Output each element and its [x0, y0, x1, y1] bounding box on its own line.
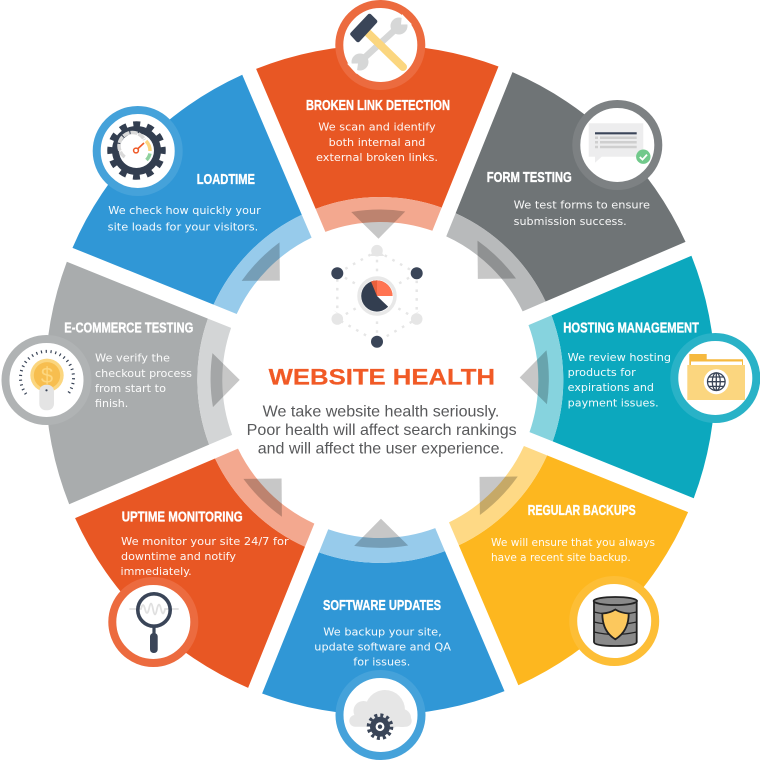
description	[120, 535, 289, 578]
icon: cloud with gear	[340, 674, 422, 756]
dashed hexagon	[337, 251, 417, 342]
description: We verify the	[95, 352, 170, 365]
dark nodes	[331, 267, 423, 348]
description: submission success.	[514, 215, 627, 228]
light nodes	[332, 245, 423, 325]
icon: form with check	[576, 104, 658, 186]
center text block: Poor health will affect search rankings	[247, 422, 517, 439]
heading: UPTIME MONITORING	[122, 509, 243, 526]
wedge	[414, 56, 701, 342]
description: We review hosting	[568, 351, 671, 364]
description: finish.	[95, 397, 128, 410]
description	[316, 121, 438, 164]
description: downtime and notify	[121, 550, 236, 563]
description	[568, 351, 671, 410]
description: both internal and	[329, 136, 425, 149]
description: We check how quickly your	[108, 204, 261, 217]
description: products for	[568, 366, 636, 379]
ring band	[207, 442, 321, 555]
panel: hosting management	[519, 256, 756, 500]
pointer triangle	[354, 518, 408, 548]
ring band	[316, 196, 442, 232]
center text block: We take website health seriously.	[263, 404, 499, 421]
icon: dollar coin and mouse: $	[41, 363, 53, 388]
description	[108, 204, 261, 233]
pointer triangle	[519, 350, 549, 404]
heading: E-COMMERCE TESTING	[64, 320, 193, 337]
description	[491, 536, 655, 564]
description: We scan and identify	[318, 121, 436, 134]
icon: hammer and wrench	[339, 4, 421, 86]
heading: REGULAR BACKUPS	[528, 502, 636, 519]
description: expirations and	[568, 381, 654, 394]
description: We test forms to ensure	[514, 199, 650, 212]
ring band	[197, 318, 232, 445]
center text block	[247, 404, 517, 457]
icon: dollar coin and mouse	[6, 339, 88, 421]
ring band	[528, 315, 564, 442]
ring band	[319, 528, 445, 564]
heading: BROKEN LINK DETECTION	[306, 97, 450, 114]
panel: software updates	[261, 518, 505, 756]
icon: database with shield	[573, 580, 655, 662]
icon: folder with globe	[674, 337, 756, 419]
description: for issues.	[353, 656, 410, 669]
wedge	[56, 59, 343, 346]
description	[314, 625, 451, 669]
heading: HOSTING MANAGEMENT	[563, 319, 699, 336]
wedge	[44, 260, 210, 504]
panel: broken link detection	[256, 4, 500, 239]
icon: gear with speed gauge	[97, 110, 179, 192]
wedge	[256, 44, 500, 209]
title: WEBSITE HEALTH	[269, 364, 495, 389]
description	[95, 352, 192, 410]
center: network graphic	[331, 245, 423, 348]
description: update software and QA	[314, 641, 451, 654]
description: external broken links.	[316, 151, 438, 164]
center text block: and will affect the user experience.	[258, 440, 504, 457]
panel: uptime monitoring	[59, 418, 347, 704]
ring band	[442, 439, 555, 553]
heading: SOFTWARE UPDATES	[323, 597, 441, 614]
description: from start to	[95, 382, 166, 395]
pointer triangle	[240, 241, 299, 300]
wedge	[261, 551, 505, 716]
description: We backup your site,	[323, 625, 442, 638]
panel: regular backups	[418, 414, 704, 701]
description	[514, 199, 650, 228]
pointer triangle	[242, 460, 301, 518]
pointer triangle	[461, 458, 519, 517]
icon: magnifier with waveform	[112, 581, 194, 663]
description: site loads for your visitors.	[108, 220, 258, 233]
description: We monitor your site 24/7 for	[121, 535, 289, 548]
description: We will ensure that you always	[491, 536, 655, 549]
wedge	[551, 256, 716, 500]
panel: loadtime	[56, 59, 343, 346]
ring band	[206, 207, 318, 321]
pointer triangle	[351, 209, 405, 239]
description: payment issues.	[568, 397, 659, 410]
description: immediately.	[120, 565, 192, 578]
panel: e-commerce testing	[6, 260, 240, 504]
pointer triangle	[459, 239, 518, 298]
pie chart	[359, 278, 395, 314]
wedge	[418, 414, 704, 701]
heading: FORM TESTING	[487, 169, 572, 186]
description: checkout process	[95, 367, 192, 380]
ring band	[439, 205, 553, 318]
description: have a recent site backup.	[491, 551, 631, 564]
wedge	[59, 418, 347, 704]
panel: form testing	[414, 56, 701, 342]
heading: LOADTIME	[197, 171, 255, 188]
pointer triangle	[210, 353, 240, 407]
